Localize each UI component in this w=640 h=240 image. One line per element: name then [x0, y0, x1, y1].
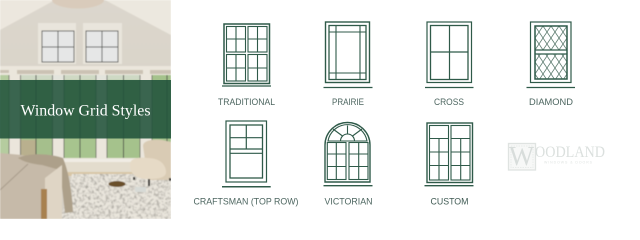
label: prairie: PRAIRIE — [332, 97, 364, 108]
panel: interior photo — [0, 0, 175, 220]
icon: craftsman window — [222, 121, 271, 187]
logo: woodland: WINDOWS & DOORS — [544, 160, 593, 164]
label: cross: CROSS — [434, 97, 464, 108]
icon: cross window — [425, 22, 474, 88]
upper windows — [38, 23, 76, 64]
icon: custom window — [424, 123, 474, 186]
title: Window Grid Styles — [20, 102, 150, 120]
label: traditional: TRADITIONAL — [218, 97, 275, 108]
label: diamond: DIAMOND — [529, 97, 573, 108]
ceiling fixture — [52, 0, 104, 8]
label: victorian: VICTORIAN — [324, 196, 373, 208]
logo: woodland: OODLAND — [535, 144, 605, 161]
book — [135, 187, 146, 192]
armchair — [143, 140, 171, 180]
green band — [0, 80, 171, 138]
icon: traditional window — [222, 24, 271, 86]
logo: woodland: W — [509, 141, 535, 171]
icon: prairie window — [324, 22, 372, 88]
label: custom: CUSTOM — [430, 196, 469, 208]
shoes — [108, 181, 126, 187]
icon: victorian window — [324, 123, 372, 186]
rug — [60, 174, 171, 219]
sill and floor — [65, 160, 130, 161]
logo: woodland — [508, 141, 605, 171]
bed footboard — [45, 165, 62, 219]
throw blanket — [18, 154, 73, 213]
ceiling slopes — [0, 0, 55, 30]
lower window wall — [0, 66, 171, 159]
icon: diamond window — [526, 22, 575, 88]
label: craftsman: CRAFTSMAN (TOP ROW) — [194, 196, 298, 208]
bed — [0, 153, 62, 219]
